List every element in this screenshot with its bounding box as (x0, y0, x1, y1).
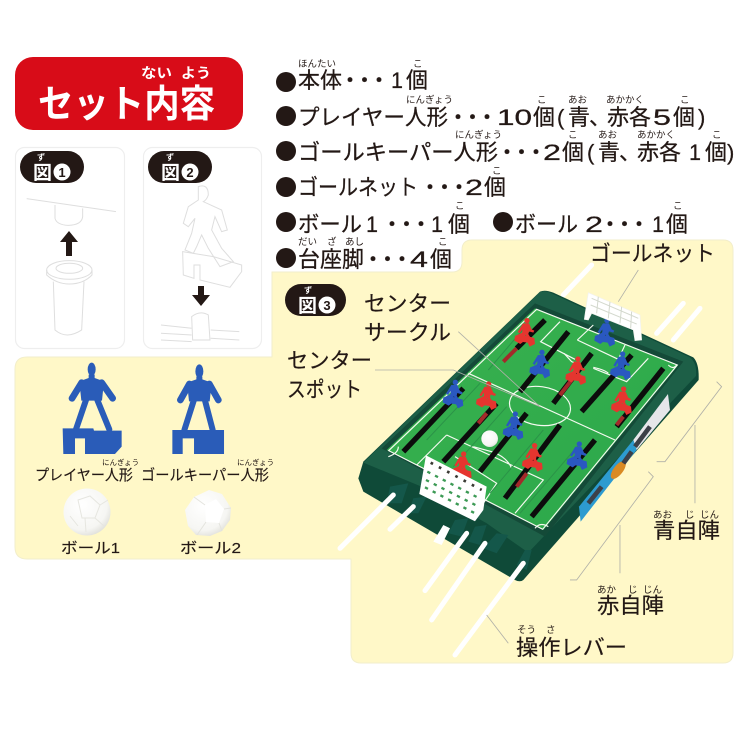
heading: contents title: よう (181, 65, 211, 81)
label: control lever: そう (517, 625, 536, 636)
label: goal net: ゴールネット (590, 242, 715, 266)
text block: parts list: あお (598, 130, 618, 141)
text block: parts list: 2 (465, 175, 483, 200)
label: player piece: プレイヤー人形 (35, 467, 133, 484)
label: goalkeeper piece: にんぎょう (237, 457, 274, 467)
playing field (387, 308, 678, 530)
text block: parts list: にんぎょう (406, 94, 453, 106)
text block: parts list: ゴールネット (298, 175, 418, 200)
text block: parts list: 赤各 (607, 105, 651, 130)
text block: parts list: こ (438, 237, 448, 248)
figure 3 badge: 3 (323, 298, 331, 313)
text block: parts list: ・・・ (599, 212, 643, 237)
label: control lever: 操作レバー (516, 636, 627, 660)
label: blue side: じ (685, 510, 695, 521)
text block: parts list: あかかく (606, 95, 644, 106)
text block: parts list: ・・・ (362, 247, 406, 272)
text block: parts list: ・・・ (447, 105, 491, 130)
label: centre circle (364, 292, 451, 345)
text block: parts list: こ (413, 59, 423, 70)
text block: parts list: 1 (391, 68, 403, 93)
figure 2 badge (148, 151, 212, 184)
near goal net (419, 455, 487, 521)
heading: contents title: ない (141, 65, 172, 81)
label: centre spot: センター (287, 349, 372, 373)
front levers (340, 495, 523, 655)
back levers (563, 265, 700, 340)
text block: parts list: 4 (410, 247, 428, 272)
text block: parts list: ボール (298, 212, 362, 237)
text block: parts list: 台座脚 (298, 247, 364, 272)
text block: parts list: ・・・ (496, 140, 540, 165)
heading: contents title (15, 57, 243, 130)
text block: parts list: 個 (448, 212, 470, 237)
text block: parts list: 、 (589, 105, 611, 130)
centre stopper (433, 525, 450, 545)
text block: parts list: 個 (705, 140, 727, 165)
label: centre spot (287, 349, 372, 402)
annotation lines (375, 270, 722, 643)
figure 3 badge: ず (304, 285, 312, 295)
player slots (403, 320, 663, 517)
figure 3 badge: 図 (298, 296, 317, 317)
label: control lever (516, 625, 627, 660)
text block: parts list: 個 (673, 105, 695, 130)
text block: parts list: こ (492, 166, 502, 177)
label: centre spot: スポット (287, 378, 362, 402)
icon: ball 2 (185, 490, 231, 536)
text block: parts list: ・・・ (419, 175, 463, 200)
text block: parts list: ・・・ (339, 68, 383, 93)
board body (358, 291, 699, 581)
figure 2 badge: 図 (161, 163, 180, 184)
label: red side: あか (597, 585, 616, 596)
text block: parts list: こ (455, 201, 465, 212)
text block: parts list: 赤各 (637, 140, 681, 165)
text block: parts list: あお (568, 95, 588, 106)
far goal net (584, 293, 642, 341)
text block: parts list: 1 (652, 212, 664, 237)
text block: parts list: あし (345, 237, 364, 248)
label: ball 1: ボール1 (61, 540, 120, 557)
figure 3 badge (285, 284, 346, 317)
text block: parts list: 1 (689, 140, 701, 165)
label: blue side: じん (700, 510, 719, 521)
text block: parts list: 本体 (298, 68, 342, 93)
text block: parts list: ゴールキーパー人形 (298, 140, 498, 165)
label: centre circle: センター (364, 292, 451, 316)
red players (451, 318, 632, 480)
figure 1 badge: 図 (33, 163, 52, 184)
text block: parts list: ほんたい (298, 59, 336, 70)
text block: parts list: こ (537, 95, 547, 106)
label: goalkeeper piece (141, 457, 274, 484)
text block: parts list: 個 (533, 105, 555, 130)
text block: parts list: 個 (666, 212, 688, 237)
text block: parts list: ・・・ (381, 212, 425, 237)
text block: parts list: 個 (484, 175, 506, 200)
label: player piece (35, 457, 139, 484)
game board (340, 265, 722, 655)
label: red side: じん (643, 585, 662, 596)
label: control lever: さ (546, 625, 556, 636)
text block: parts list: 青 (598, 140, 620, 165)
text block: parts list: こ (568, 130, 578, 141)
figure 1 badge: 1 (58, 165, 66, 180)
text block: parts list: ざ (327, 236, 337, 248)
label: ball 2: ボール2 (180, 540, 241, 557)
text block: parts list: 1 (366, 212, 378, 237)
text block: parts list: こ (673, 201, 683, 212)
text block: parts list: ( (557, 105, 565, 130)
label: blue side: 青自陣 (653, 519, 720, 543)
text block: parts list: ( (587, 140, 595, 165)
label: blue side: あお (653, 510, 672, 521)
text block: parts list: 5 (653, 105, 671, 130)
icon: blue player piece (63, 363, 122, 454)
text block: parts list: ボール (515, 212, 578, 237)
icon: blue goalkeeper piece (172, 364, 224, 454)
text block: parts list: 2 (585, 212, 603, 237)
text block: parts list: ) (727, 140, 734, 165)
text block: parts list: 個 (430, 247, 452, 272)
text block: parts list: 個 (406, 68, 428, 93)
figure 1 badge: ず (37, 152, 45, 162)
text block: parts list: こ (680, 95, 690, 106)
text block: parts list (276, 59, 734, 272)
label: player piece: にんぎょう (102, 457, 139, 467)
panel: figure 2 (144, 148, 262, 348)
text block: parts list: 1 (431, 212, 443, 237)
red rods (478, 348, 623, 487)
panel: figure 1 (16, 148, 124, 348)
text block: parts list: にんぎょう (455, 129, 502, 141)
text block: parts list: こ (712, 130, 722, 141)
panel: yellow background (15, 240, 733, 663)
figure 2 badge: 2 (186, 165, 194, 180)
text block: parts list: ) (698, 105, 705, 130)
figure 1 badge (20, 151, 84, 184)
text block: parts list: 個 (562, 140, 584, 165)
text block: parts list: 青 (568, 105, 590, 130)
rail stripes (427, 323, 580, 513)
ball on field (481, 430, 498, 447)
lever sockets (387, 483, 532, 570)
text block: parts list: 2 (543, 140, 561, 165)
heading: contents title: セット内容 (38, 84, 215, 126)
label: centre circle: サークル (364, 321, 451, 345)
text block: parts list: 10 (497, 105, 532, 130)
label: goalkeeper piece: ゴールキーパー人形 (141, 466, 269, 484)
label: red side: じ (628, 585, 638, 596)
text block: parts list: あかかく (637, 130, 675, 141)
blue players (443, 318, 631, 470)
text block: parts list: 、 (619, 140, 641, 165)
icon: ball 1 (64, 488, 110, 536)
text block: parts list: だい (298, 237, 317, 248)
label: red side: 赤自陣 (597, 594, 664, 618)
text block: parts list: プレイヤー人形 (298, 105, 448, 130)
figure 2 badge: ず (166, 152, 174, 162)
side label sticker (579, 394, 670, 522)
